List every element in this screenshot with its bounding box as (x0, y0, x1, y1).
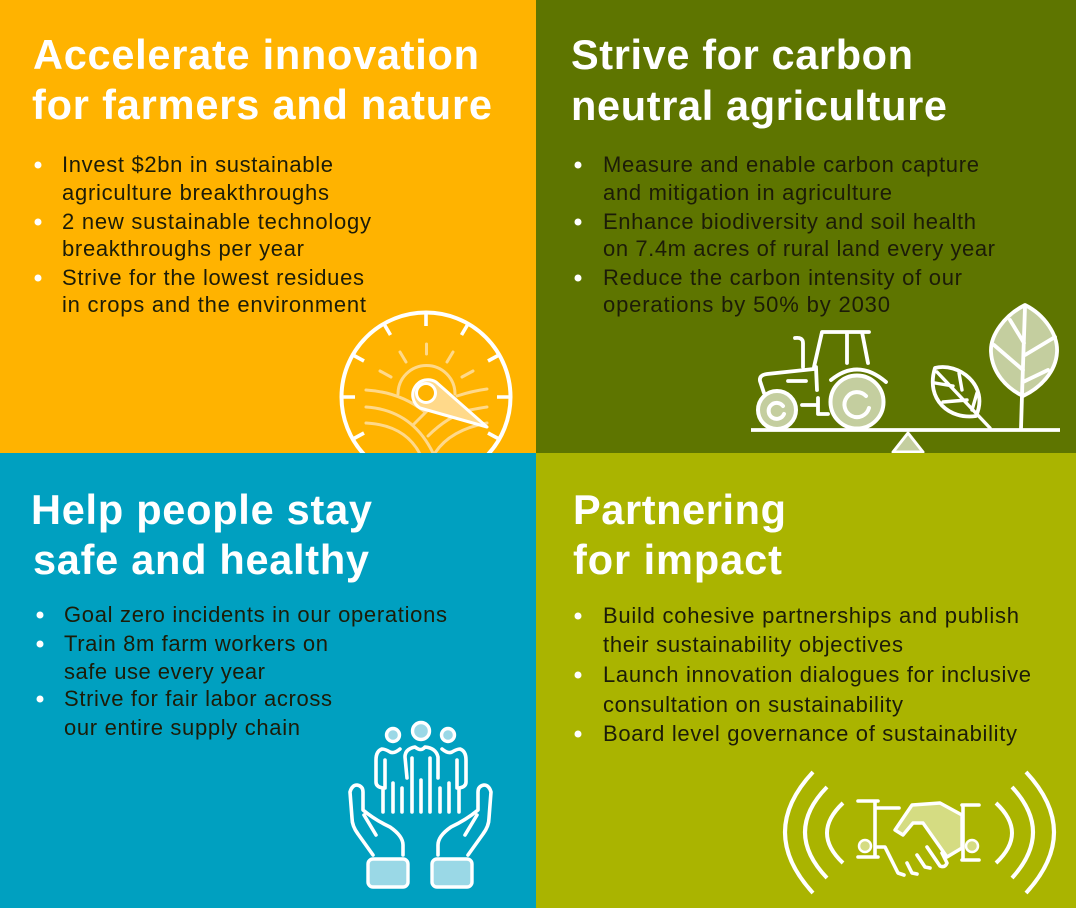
icon: gauge with sunrise over fields (340, 310, 512, 453)
bullet list: innovation goals: in crops and the environment (62, 292, 366, 317)
heading: partnering for impact: for impact (573, 536, 782, 583)
bullet list: safety goals: safe use every year (64, 659, 265, 684)
bullet list: safety goals: Goal zero incidents in our operations (64, 602, 447, 627)
bullet list: partnership goals: their sustainability objectives (603, 632, 903, 657)
bullet list: innovation goals: 2 new sustainable technology (62, 209, 371, 234)
heading: carbon neutral agriculture: neutral agriculture (571, 82, 947, 129)
bullet list: safety goals: Train 8m farm workers on (64, 631, 328, 656)
icon: handshake with signal arcs (785, 772, 1054, 893)
bullet list: partnership goals: Build cohesive partnerships and publish (603, 603, 1019, 628)
bullet list: carbon goals (574, 152, 995, 317)
bullet list: carbon goals: on 7.4m acres of rural land every year (603, 236, 995, 261)
bullet list: safety goals (36, 602, 447, 740)
bullet list: safety goals: our entire supply chain (64, 715, 300, 740)
heading: partnering for impact (573, 486, 786, 583)
bullet list: innovation goals: Invest $2bn in sustainable (62, 152, 333, 177)
bullet list: partnership goals: Launch innovation dialogues for inclusive (603, 662, 1031, 687)
heading: accelerate innovation (32, 31, 492, 128)
heading: accelerate innovation: for farmers and nature (32, 81, 492, 128)
bullet list: carbon goals: operations by 50% by 2030 (603, 292, 890, 317)
heading: safe and healthy: safe and healthy (33, 536, 369, 583)
panel: safe and healthy (0, 453, 536, 908)
panel: partnering for impact (536, 453, 1076, 908)
heading: carbon neutral agriculture (571, 31, 947, 129)
bullet list: partnership goals: Board level governance of sustainability (603, 721, 1017, 746)
bullet list: carbon goals: Enhance biodiversity and soil health (603, 209, 976, 234)
bullet list: partnership goals: consultation on sustainability (603, 692, 903, 717)
heading: safe and healthy (31, 486, 372, 583)
bullet list: innovation goals: breakthroughs per year (62, 236, 304, 261)
icon: hands holding three people (350, 722, 491, 887)
panel: accelerate innovation (0, 0, 536, 482)
bullet list: innovation goals (34, 152, 371, 317)
heading: safe and healthy: Help people stay (31, 486, 372, 533)
heading: partnering for impact: Partnering (573, 486, 786, 533)
bullet list: carbon goals: and mitigation in agriculture (603, 180, 892, 205)
icon: tractor balanced against leaves on a scale (751, 305, 1060, 452)
bullet list: partnership goals (574, 603, 1031, 746)
heading: carbon neutral agriculture: Strive for carbon (571, 31, 913, 78)
bullet list: innovation goals: Strive for the lowest residues (62, 265, 364, 290)
bullet list: innovation goals: agriculture breakthroughs (62, 180, 329, 205)
bullet list: carbon goals: Reduce the carbon intensity of our (603, 265, 962, 290)
bullet list: safety goals: Strive for fair labor across (64, 686, 332, 711)
heading: accelerate innovation: Accelerate innovation (33, 31, 479, 78)
bullet list: carbon goals: Measure and enable carbon capture (603, 152, 979, 177)
panel: carbon neutral agriculture (536, 0, 1076, 454)
